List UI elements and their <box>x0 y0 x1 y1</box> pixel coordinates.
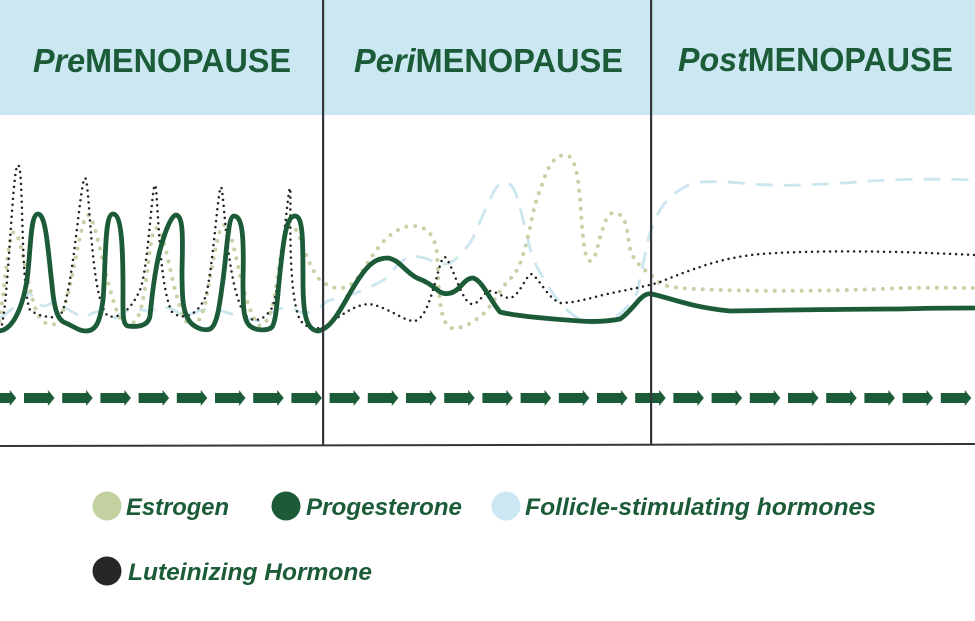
heading: PostMENOPAUSE: PostMENOPAUSE <box>678 41 953 78</box>
legend item: estrogen <box>92 492 229 521</box>
legend <box>92 492 876 586</box>
heading: PeriMENOPAUSE: PeriMENOPAUSE <box>354 42 623 79</box>
legend item: follicle-stimulating hormones: Follicle-stimulating hormones <box>525 494 876 521</box>
heading: PreMENOPAUSE: PreMENOPAUSE <box>33 42 291 79</box>
legend item: progesterone: Progesterone <box>306 494 462 521</box>
line: estrogen <box>0 155 975 330</box>
header band <box>0 0 975 115</box>
arrow row <box>0 388 975 408</box>
legend item: estrogen: Estrogen <box>126 494 229 521</box>
x axis <box>0 444 975 446</box>
line: follicle-stimulating hormones <box>0 179 975 323</box>
divider: premenopause/perimenopause <box>322 0 324 445</box>
line: luteinizing hormone <box>0 165 975 330</box>
legend item: luteinizing hormone: Luteinizing Hormone <box>128 559 372 586</box>
chart <box>0 155 975 408</box>
line: progesterone <box>0 214 975 331</box>
divider: perimenopause/postmenopause <box>650 0 652 445</box>
